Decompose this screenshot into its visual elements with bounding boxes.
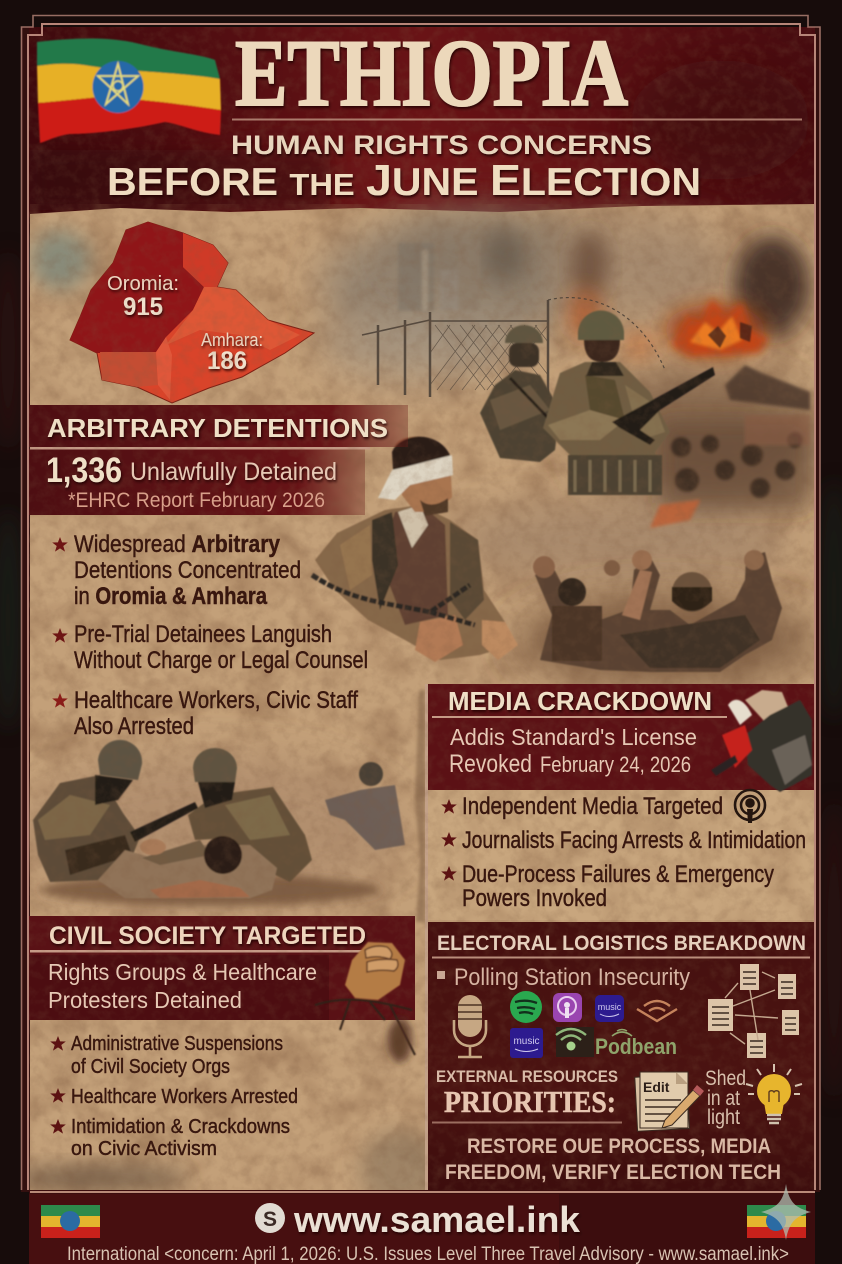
icon: amazon music [595,995,624,1022]
electoral rule [432,956,810,958]
list: civil society bullets [50,1033,298,1160]
icon: audible [637,1001,677,1021]
list: media bullets [441,793,806,912]
panel: parchment scene background [10,204,830,1210]
list: civil society bullets: Intimidation & Crackdowns [71,1116,290,1138]
icon: spotify [510,991,542,1023]
bullet: polling station insecurity: Polling Station Insecurity [454,964,690,991]
priorities rule [432,1122,622,1124]
text: rights groups: Rights Groups & Healthcare [48,959,317,985]
distant city towers [398,240,480,311]
stat: 1,336 unlawfully detained [46,451,337,490]
icon: Ethiopian flag [37,38,221,143]
list: arbitrary detentions bullets: Without Charge or Legal Counsel [74,647,368,674]
illustration: front soldier with rifle [543,310,715,495]
icon: samael logo: S [263,1208,277,1231]
list: arbitrary detentions bullets [52,531,368,740]
title: ETHIOPIA: ETHIOPIA [235,20,628,126]
list: media bullets: Independent Media Targeted [462,793,723,820]
heading: electoral logistics breakdown: ELECTORAL LOGISTICS BREAKDOWN [437,932,806,955]
icon: amazon music alt: music [513,1036,540,1047]
panel: electoral logistics background [428,922,815,1190]
icon: podcast [735,790,765,823]
label: Amhara 186: Amhara: [201,330,263,350]
media rule [432,716,727,718]
list: media bullets: Powers Invoked [462,885,607,912]
icon: footer flag left [41,1205,100,1238]
heading: arbitrary detentions: ARBITRARY DETENTIONS [47,413,388,443]
illustration: blindfolded detainee in chains [312,436,518,662]
icon: broadcast signal [556,1027,594,1057]
icon: amazon music: music [598,1002,622,1012]
text: shed in at light: light [707,1106,740,1129]
text: Addis Standard license: Revoked [449,750,532,778]
text: Addis Standard license: Addis Standard's License [450,724,697,750]
icon: edit document and pencil [635,1072,704,1131]
list: civil society bullets: Administrative Suspensions [71,1033,283,1055]
icon: connected documents [708,964,799,1058]
icon: amazon music alt [510,1028,543,1058]
stat: 1,336 unlawfully detained: 1,336 [46,451,122,490]
panel: media crackdown column background [415,684,815,1192]
icon: sparkle mark [761,1184,811,1240]
label: Oromia 915 [107,273,179,321]
icon: footer flag right [747,1205,806,1238]
stat: 1,336 unlawfully detained: Unlawfully Detained [130,458,337,486]
text: rights groups: Protesters Detained [48,987,242,1013]
list: arbitrary detentions bullets: Widespread Arbitrary [74,531,281,558]
icon: raised fist [315,942,415,1062]
chain-link fence [362,298,665,397]
list: arbitrary detentions bullets: Healthcare Workers, Civic Staff [74,687,358,714]
list: arbitrary detentions bullets: Also Arrested [74,713,194,740]
label: Podbean: Podbean [595,1034,677,1059]
heading: civil society targeted: CIVIL SOCIETY TARGETED [49,922,366,950]
icon: samael logo [255,1203,285,1233]
burning smoke and fire [485,229,810,359]
label: Amhara 186 [201,330,263,375]
panel: footer band [29,1190,815,1264]
icon: light bulb [746,1064,802,1123]
header rule [232,118,802,120]
text: shed in at light: in at [707,1087,740,1110]
list: civil society bullets: of Civil Society Orgs [71,1056,230,1078]
list: civil society bullets: on Civic Activism [71,1138,217,1160]
list: arbitrary detentions bullets: Detentions Concentrated [74,557,301,584]
list: media bullets: Due-Process Failures & Emergency [462,861,774,888]
illustration: soldiers detaining a man [33,740,405,906]
list: arbitrary detentions bullets: in Oromia & Amhara [74,583,268,610]
icon: apple podcasts [553,993,582,1022]
illustration: rear soldier [480,325,560,462]
list: civil society bullets: Healthcare Workers Arrested [71,1086,298,1108]
source note: *EHRC Report February 2026 [68,489,325,512]
label: Amhara 186: 186 [207,347,247,375]
illustration: protesting crowd [533,550,782,672]
label: Oromia 915: 915 [123,293,163,321]
text: priorities call to action: FREEDOM, VERIFY ELECTION TECH [445,1161,781,1184]
heading: media crackdown: MEDIA CRACKDOWN [448,686,712,716]
subtitle line 2: BEFORE THE JUNE ELECTION [107,156,701,205]
panel: civil society banners [29,916,415,1020]
icons: podcast platforms [510,991,677,1059]
map: Ethiopia with Oromia and Amhara counts [70,222,314,403]
heading: priorities: PRIORITIES: [444,1084,616,1119]
icon: megaphone and typewriter [711,690,812,792]
icon: studio microphone [454,995,486,1057]
list: arbitrary detentions bullets: Pre-Trial Detainees Languish [74,621,332,648]
text: priorities call to action [445,1135,781,1184]
subtitle line 1: HUMAN RIGHTS CONCERNS [231,130,652,160]
panel: header band [29,27,815,217]
label: Oromia 915: Oromia: [107,273,179,295]
text: Addis Standard license: February 24, 2026 [540,752,691,777]
text: shed in at light: Shed [705,1067,746,1090]
text: priorities call to action: RESTORE OUE PROCESS, MEDIA [467,1135,771,1158]
text: Addis Standard license [449,724,697,778]
illustration: crowd behind soldiers [650,365,810,528]
text: rights groups [48,959,317,1013]
panel: arbitrary detentions banners [29,405,408,515]
icon: edit document and pencil: Edit [643,1079,670,1095]
text: shed in at light [705,1067,746,1129]
footer url: www.samael.ink [293,1199,581,1240]
label: external resources: EXTERNAL RESOURCES [436,1067,618,1086]
